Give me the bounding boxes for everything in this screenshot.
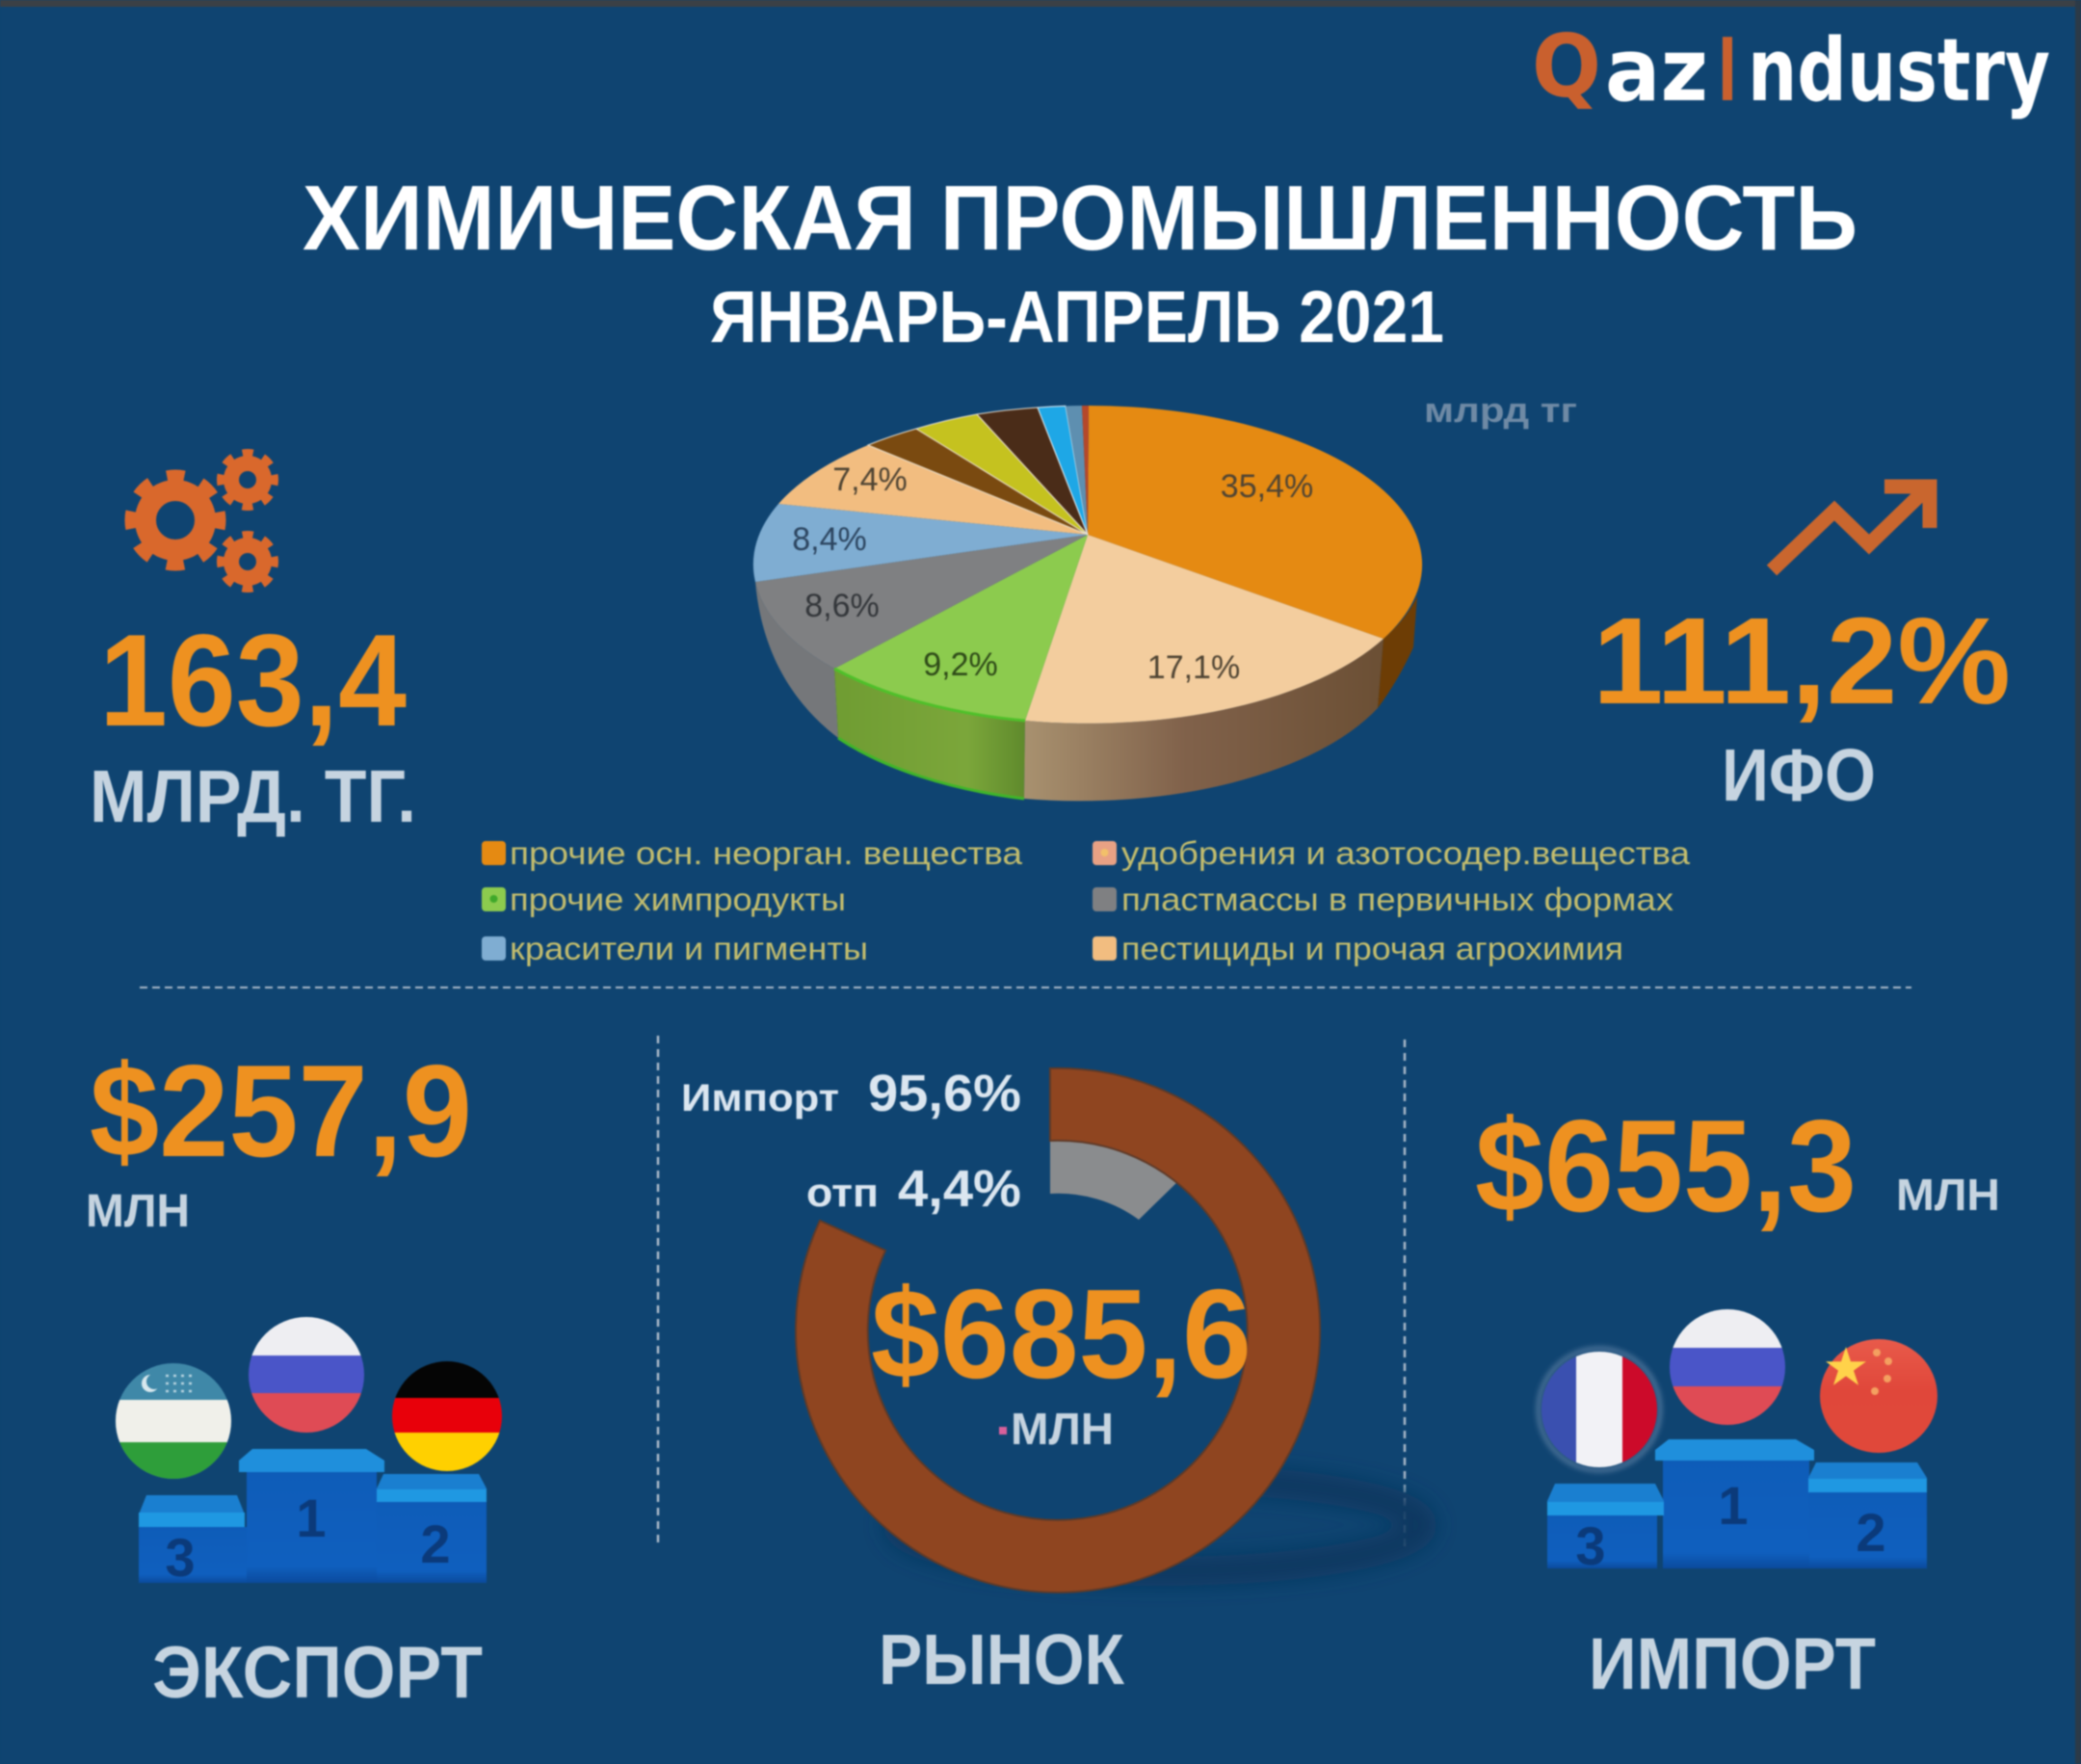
- legend: прочие химпродукты: [510, 882, 846, 917]
- title: ХИМИЧЕСКАЯ ПРОМЫШЛЕННОСТЬ: [303, 167, 1857, 270]
- export value: $257,9: [90, 1038, 472, 1184]
- market shares: отп: [806, 1170, 879, 1215]
- import value: МЛН: [1896, 1170, 2000, 1220]
- logo: QazIndustry: [1532, 16, 2050, 121]
- market value: $685,6: [871, 1263, 1251, 1405]
- legend: пластмассы в первичных формах: [1121, 882, 1674, 917]
- label: export: ЭКСПОРТ: [152, 1632, 483, 1714]
- icon: growth arrow: [1772, 487, 1930, 570]
- pie chart: 17,1%: [1147, 649, 1240, 686]
- unit label: млрд тг: [1424, 390, 1577, 430]
- import value: $655,3: [1475, 1093, 1857, 1239]
- label: import: ИМПОРТ: [1589, 1623, 1876, 1705]
- market shares: [681, 1065, 1021, 1218]
- market value: МЛН: [1011, 1404, 1114, 1454]
- flag: France: [1539, 1349, 1660, 1470]
- logo: QazIndustry: az: [1605, 20, 1708, 121]
- donut chart: market: [796, 1068, 1422, 1593]
- pie chart: 7,4%: [832, 461, 908, 498]
- pie chart: [753, 406, 1422, 801]
- flag: Russia (import): [1670, 1309, 1785, 1426]
- pie chart: 8,4%: [792, 521, 867, 558]
- stat: production index: [1593, 592, 2011, 817]
- flag: Uzbekistan: [116, 1363, 231, 1481]
- podium: import: [1547, 1439, 1927, 1576]
- pie chart: 35,4%: [1221, 468, 1313, 505]
- stat: production index: ИФО: [1722, 734, 1876, 817]
- podium: export: 2: [420, 1514, 451, 1574]
- legend: [482, 835, 1691, 966]
- pie chart: 8,6%: [804, 588, 880, 624]
- flag: Germany: [392, 1361, 502, 1472]
- legend: пестициды и прочая агрохимия: [1121, 931, 1623, 966]
- logo: QazIndustry: I: [1718, 20, 1737, 121]
- podium: export: 1: [296, 1488, 327, 1548]
- flag: Russia (export): [249, 1317, 364, 1434]
- stat: production volume: [90, 607, 416, 838]
- pie chart: 9,2%: [923, 646, 998, 683]
- legend: красители и пигменты: [510, 931, 868, 966]
- podium: import: 1: [1718, 1475, 1749, 1536]
- flag: China: [1820, 1339, 1937, 1453]
- export value: МЛН: [86, 1186, 190, 1237]
- podium: import: 3: [1575, 1515, 1606, 1576]
- label: market: РЫНОК: [879, 1619, 1125, 1699]
- market shares: 4,4%: [898, 1160, 1021, 1218]
- stat: production volume: МЛРД. ТГ.: [90, 755, 416, 838]
- logo: QazIndustry: Q: [1532, 16, 1601, 118]
- market shares: Импорт: [681, 1077, 839, 1119]
- podium: export: [139, 1449, 487, 1588]
- market shares: 95,6%: [868, 1065, 1021, 1122]
- stat: production index: 111,2%: [1593, 592, 2011, 730]
- icon: gears: [131, 454, 274, 588]
- stat: production volume: 163,4: [99, 607, 407, 753]
- podium: import: 2: [1856, 1502, 1886, 1563]
- legend: удобрения и азотосодер.вещества: [1121, 835, 1691, 871]
- subtitle: ЯНВАРЬ-АПРЕЛЬ 2021: [710, 276, 1444, 358]
- legend: прочие осн. неорган. вещества: [510, 835, 1023, 871]
- podium: export: 3: [165, 1527, 196, 1588]
